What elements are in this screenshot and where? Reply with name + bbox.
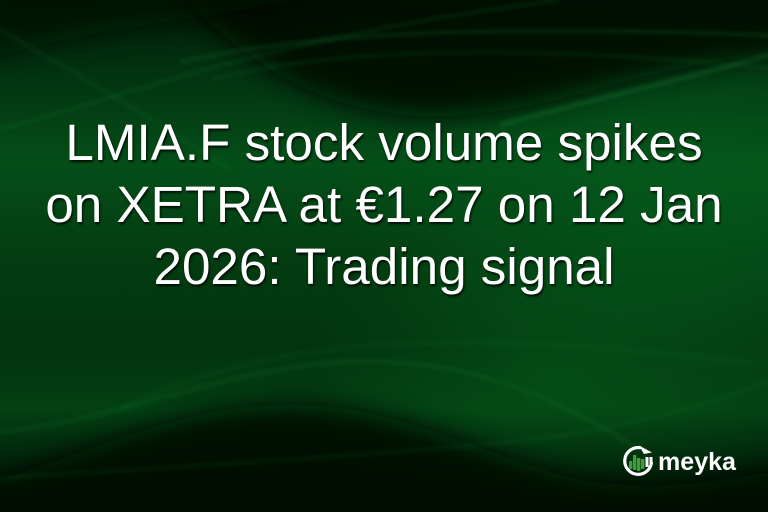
icon: ring with bars	[625, 446, 652, 474]
logo: meyka	[623, 446, 737, 476]
title: on XETRA at €1.27 on 12 Jan	[45, 176, 723, 233]
title: 2026: Trading signal	[153, 238, 614, 295]
title	[45, 114, 723, 298]
wordmark: meyka	[658, 448, 737, 476]
title: LMIA.F stock volume spikes	[65, 114, 703, 171]
